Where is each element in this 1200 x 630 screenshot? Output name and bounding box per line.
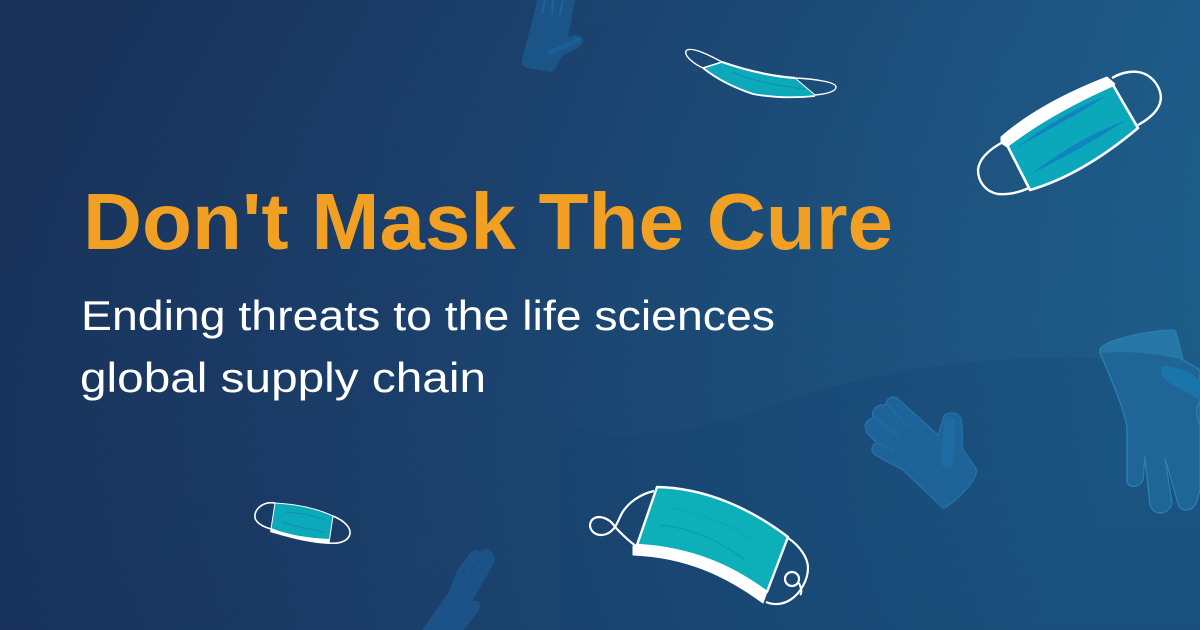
glove: middle right: [865, 397, 977, 508]
mask: bottom center: [590, 487, 808, 604]
mask: top right: [978, 72, 1161, 194]
subtitle: Ending threats to the life sciences: [81, 292, 775, 339]
glove: top: [522, 0, 583, 72]
title: Don't Mask The Cure: [83, 177, 893, 266]
subtitle: global supply chain: [80, 354, 486, 401]
mask: top center: [686, 49, 836, 97]
glove: bottom: [422, 549, 495, 630]
subtitle: [80, 292, 775, 401]
mask: small lower left: [255, 503, 350, 544]
glove: large right: [1100, 330, 1200, 513]
